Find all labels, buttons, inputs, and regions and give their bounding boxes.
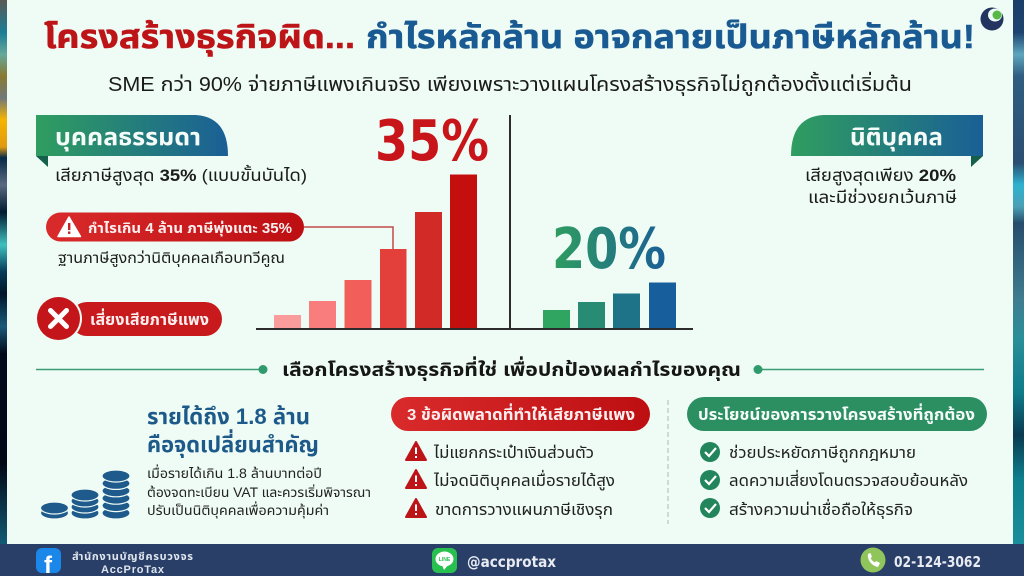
title xyxy=(44,18,975,57)
label: 20%: 20% xyxy=(552,217,666,282)
callout: profit over 4 million xyxy=(46,212,304,242)
text: office name xyxy=(72,551,193,576)
bars: corporate tax xyxy=(543,282,676,329)
text: VAT explanation: ปรับเป็นนิติบุคคลเพื่อความคุ้มค่า xyxy=(147,501,329,519)
mistake 3 xyxy=(406,499,613,519)
text: VAT explanation xyxy=(147,464,371,519)
heading pill: benefits: ประโยชน์ของการวางโครงสร้างที่ถูกต้อง xyxy=(698,403,975,425)
panel: corporate xyxy=(791,115,983,207)
text: corporate max tax: เสียสูงสุดเพียง 20% xyxy=(805,167,956,185)
benefit 1: ช่วยประหยัดภาษีถูกกฎหมาย xyxy=(729,444,916,462)
callout: profit over 4 million: กำไรเกิน 4 ล้าน ภาษีพุ่งแตะ 35% xyxy=(88,220,292,237)
mistake 3: ขาดการวางแผนภาษีเชิงรุก xyxy=(435,502,613,519)
mistake 2 xyxy=(406,469,615,490)
text: VAT explanation: เมื่อรายได้เกิน 1.8 ล้านบาทต่อปี xyxy=(147,464,322,481)
left decorative strip xyxy=(0,0,7,544)
heading pill: benefits xyxy=(687,397,987,431)
chart: tax bars comparison xyxy=(256,109,693,329)
section divider heading: เลือกโครงสร้างธุรกิจที่ใช่ เพื่อปกป้องผลกำไรของคุณ xyxy=(282,356,741,381)
title: โครงสร้างธุรกิจผิด... xyxy=(44,18,355,57)
icon: coin stacks xyxy=(40,470,130,519)
connector line xyxy=(304,227,393,249)
icon: facebook xyxy=(36,548,61,576)
heading pill: mistakes xyxy=(391,397,650,431)
icon: line xyxy=(432,548,457,573)
panel: 3 mistakes xyxy=(391,397,650,519)
text: VAT explanation: ต้องจดทะเบียน VAT และควรเริ่มพิจารณา xyxy=(147,484,371,500)
subtitle: SME กว่า 90% จ่ายภาษีแพงเกินจริง เพียงเพราะวางแผนโครงสร้างธุรกิจไม่ถูกต้องตั้งแต่เริ่มต้น xyxy=(108,71,912,97)
ribbon: individual xyxy=(36,115,228,167)
footer bar xyxy=(0,544,1024,576)
section divider heading xyxy=(36,356,984,381)
mistake 1: ไม่แยกกระเป๋าเงินส่วนตัว xyxy=(433,444,594,462)
text: office name: สำนักงานบัญชีครบวงจร xyxy=(72,551,193,563)
text: tax base note: ฐานภาษีสูงกว่านิติบุคคลเกือบทวีคูณ xyxy=(58,249,285,267)
badge: risk of high tax xyxy=(35,295,222,342)
badge: risk of high tax: เสี่ยงเสียภาษีแพง xyxy=(90,308,209,329)
bars: individual tax xyxy=(274,174,477,329)
right decorative strip xyxy=(1013,0,1024,544)
text: line id: @accprotax xyxy=(467,553,556,571)
text: phone number: 02-124-3062 xyxy=(894,553,981,571)
ribbon: corporate: นิติบุคคล xyxy=(850,124,943,152)
icon: logo xyxy=(980,8,1004,30)
icon: line: LINE xyxy=(439,557,451,563)
icon: phone xyxy=(860,548,886,572)
heading: 1.8 million: รายได้ถึง 1.8 ล้าน xyxy=(147,404,310,429)
ribbon: individual: บุคคลธรรมดา xyxy=(55,124,201,152)
label: 35%: 35% xyxy=(375,109,489,174)
text: exemption: และมีช่วงยกเว้นภาษี xyxy=(808,189,957,207)
heading pill: mistakes: 3 ข้อผิดพลาดที่ทำให้เสียภาษีแพง xyxy=(407,403,635,424)
text: office name: AccProTax xyxy=(101,564,165,576)
panel: benefits xyxy=(687,397,987,519)
panel: 1.8 million turning point xyxy=(40,404,371,519)
mistake 1 xyxy=(406,442,594,462)
benefit 2 xyxy=(700,469,968,490)
heading: 1.8 million xyxy=(147,404,319,458)
axis xyxy=(256,115,693,329)
mistake 2: ไม่จดนิติบุคคลเมื่อรายได้สูง xyxy=(433,469,615,490)
panel: individual xyxy=(35,115,307,342)
heading: 1.8 million: คือจุดเปลี่ยนสำคัญ xyxy=(147,429,319,458)
benefit 3 xyxy=(700,498,913,519)
title: กำไรหลักล้าน อาจกลายเป็นภาษีหลักล้าน! xyxy=(366,18,975,55)
ribbon: corporate xyxy=(791,115,983,167)
text: individual max tax: เสียภาษีสูงสุด 35% (แบบขั้นบันได) xyxy=(55,164,307,187)
benefit 2: ลดความเสี่ยงโดนตรวจสอบย้อนหลัง xyxy=(729,469,968,490)
benefit 3: สร้างความน่าเชื่อถือให้ธุรกิจ xyxy=(729,498,913,519)
